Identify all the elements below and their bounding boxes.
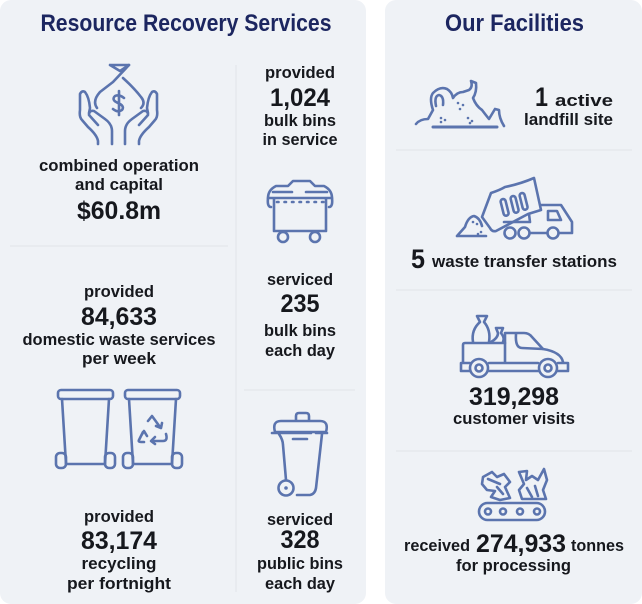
text: customer visits: customer visits	[453, 410, 575, 428]
icon: hands holding money bag	[80, 65, 157, 144]
panel: resource recovery services	[0, 0, 366, 604]
text: public bins each day: each day	[265, 575, 336, 593]
text: bulk bins each day	[264, 271, 336, 360]
text: bulk bins each day: 235	[280, 290, 320, 318]
text: recycling per fortnight: per fortnight	[67, 575, 172, 593]
icon: pickup truck with rubbish bags	[461, 316, 568, 377]
text: domestic waste services: per week	[82, 350, 157, 368]
text: recycling per fortnight	[67, 508, 172, 593]
text: bulk bins in service: provided	[265, 64, 335, 82]
text: public bins each day	[257, 511, 343, 593]
text: customer visits	[453, 383, 575, 428]
text: bulk bins in service	[262, 64, 338, 149]
text: bulk bins each day: bulk bins	[264, 322, 336, 340]
text: combined operation and capital: $60.8m	[77, 197, 161, 225]
text: bulk bins in service: in service	[262, 131, 338, 149]
text: active landfill site: 1	[535, 82, 548, 112]
icon: recycling wheelie bin	[123, 390, 182, 468]
text: bulk bins each day: each day	[265, 342, 336, 360]
text: tonnes for processing: received	[404, 537, 470, 555]
text: domestic waste services: domestic waste services	[22, 331, 216, 349]
text: recycling per fortnight: 83,174	[81, 527, 157, 555]
text: tonnes for processing: 274,933	[476, 530, 566, 558]
text: public bins each day: serviced	[267, 511, 333, 529]
text: active landfill site	[524, 82, 613, 129]
text: combined operation and capital	[39, 157, 199, 225]
text: recycling per fortnight: recycling	[82, 555, 156, 573]
text: domestic waste services: 84,633	[81, 303, 157, 331]
text: waste transfer stations: 5	[411, 244, 425, 274]
text: bulk bins each day: serviced	[267, 271, 333, 289]
icon: conveyor belt with waste	[479, 469, 547, 520]
text: tonnes for processing: tonnes	[571, 537, 624, 555]
text: waste transfer stations	[411, 244, 617, 274]
text: domestic waste services	[22, 283, 216, 368]
text: public bins each day: public bins	[257, 555, 343, 573]
text: bulk bins in service: 1,024	[270, 84, 330, 112]
text: tonnes for processing: for processing	[456, 557, 571, 575]
text: recycling per fortnight: provided	[84, 508, 154, 526]
text: active landfill site: active	[555, 92, 613, 110]
icon: landfill mound	[416, 81, 504, 127]
text: waste transfer stations: waste transfer stations	[431, 253, 617, 271]
icon: dump truck	[457, 178, 572, 238]
text: bulk bins in service: bulk bins	[264, 112, 336, 130]
text: public bins each day: 328	[280, 526, 320, 554]
heading: resource recovery services: Resource Recovery Services	[40, 10, 332, 37]
icon: public bin	[272, 413, 327, 496]
heading: our facilities: Our Facilities	[445, 10, 584, 37]
icon: general waste wheelie bin	[56, 390, 115, 468]
text: customer visits: 319,298	[469, 383, 559, 411]
panel: our facilities	[385, 0, 642, 604]
text: tonnes for processing	[404, 530, 624, 575]
icon: bulk bin	[268, 181, 332, 242]
text: domestic waste services: provided	[84, 283, 154, 301]
text: combined operation and capital: combined operation	[39, 157, 199, 175]
text: combined operation and capital: and capital	[75, 176, 163, 194]
text: active landfill site: landfill site	[524, 111, 613, 129]
